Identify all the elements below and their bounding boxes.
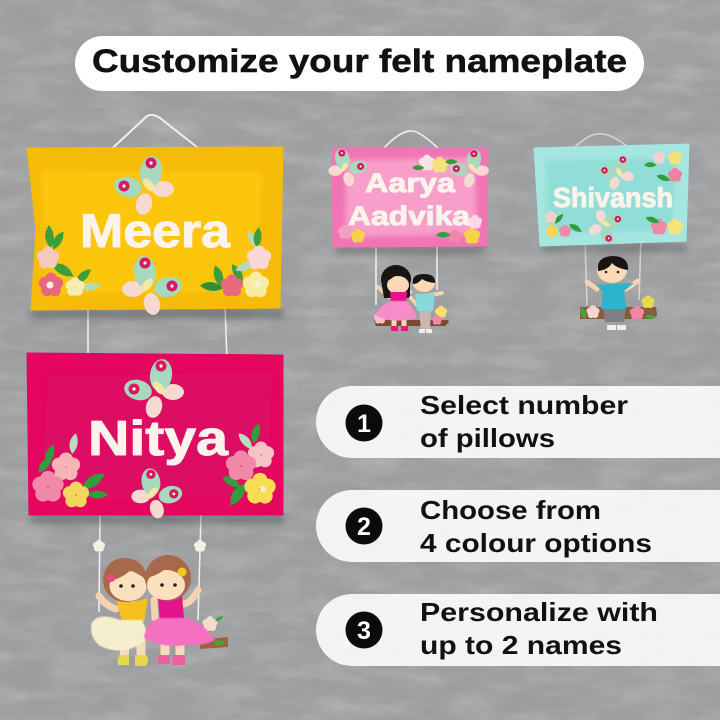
butterfly bbox=[594, 151, 637, 194]
butterfly bbox=[448, 148, 489, 189]
title pill bbox=[75, 36, 644, 91]
hanging strings bbox=[88, 115, 641, 620]
swing with two dolls bbox=[91, 540, 228, 666]
flowers left bbox=[32, 432, 108, 507]
name: Shivansh: Shivansh bbox=[553, 182, 673, 213]
step 1 bbox=[316, 386, 720, 458]
flowers bbox=[545, 151, 683, 237]
step 1 text: Select number bbox=[420, 390, 628, 420]
step 2: 4 colour options bbox=[420, 528, 652, 558]
step 1: of pillows bbox=[420, 423, 555, 453]
doll: pink dress bbox=[144, 555, 215, 665]
step 3 text: Personalize with bbox=[420, 597, 658, 627]
flowers right bbox=[200, 227, 271, 297]
doll: yellow dress bbox=[91, 558, 148, 666]
doll: boy in blue bbox=[587, 256, 638, 330]
swing seat bbox=[374, 320, 449, 326]
pillow: pink Nitya bbox=[27, 353, 284, 524]
number badge 1 bbox=[346, 404, 382, 442]
number badge 2 bbox=[346, 508, 382, 544]
names: Aarya bbox=[365, 168, 456, 198]
swing with girl and boy bbox=[374, 265, 449, 333]
flowers left bbox=[37, 225, 101, 296]
butterfly bbox=[583, 204, 629, 250]
number badge 3 bbox=[346, 612, 382, 648]
step 3: up to 2 names bbox=[420, 630, 622, 660]
number badge 1: 1 bbox=[357, 410, 371, 438]
butterfly bbox=[112, 155, 174, 217]
swing seat bbox=[580, 307, 657, 319]
name: Meera: Meera bbox=[80, 204, 231, 257]
name: Nitya: Nitya bbox=[88, 412, 229, 466]
title: Customize your felt nameplate bbox=[92, 43, 627, 79]
flowers right bbox=[221, 422, 276, 508]
step 2 bbox=[316, 490, 720, 562]
pillow: yellow Meera bbox=[27, 147, 284, 318]
pillow: mint Shivansh bbox=[534, 144, 689, 252]
flowers bbox=[338, 155, 482, 244]
butterfly bbox=[122, 358, 184, 420]
butterfly bbox=[122, 255, 184, 317]
swing bead flowers bbox=[93, 540, 206, 552]
swing with boy bbox=[579, 256, 657, 330]
names: Aadvika bbox=[348, 201, 471, 231]
swing seat bbox=[200, 637, 228, 649]
butterfly bbox=[131, 467, 184, 520]
doll: girl bbox=[376, 265, 417, 331]
step 3 bbox=[316, 594, 720, 666]
number badge 3: 3 bbox=[357, 617, 371, 645]
doll: boy bbox=[411, 274, 442, 333]
step 2 text: Choose from bbox=[420, 495, 601, 525]
names bbox=[348, 168, 471, 231]
number badge 2: 2 bbox=[357, 513, 371, 541]
pillow: pink Aarya Aadvika bbox=[327, 145, 489, 254]
butterfly bbox=[327, 145, 370, 189]
